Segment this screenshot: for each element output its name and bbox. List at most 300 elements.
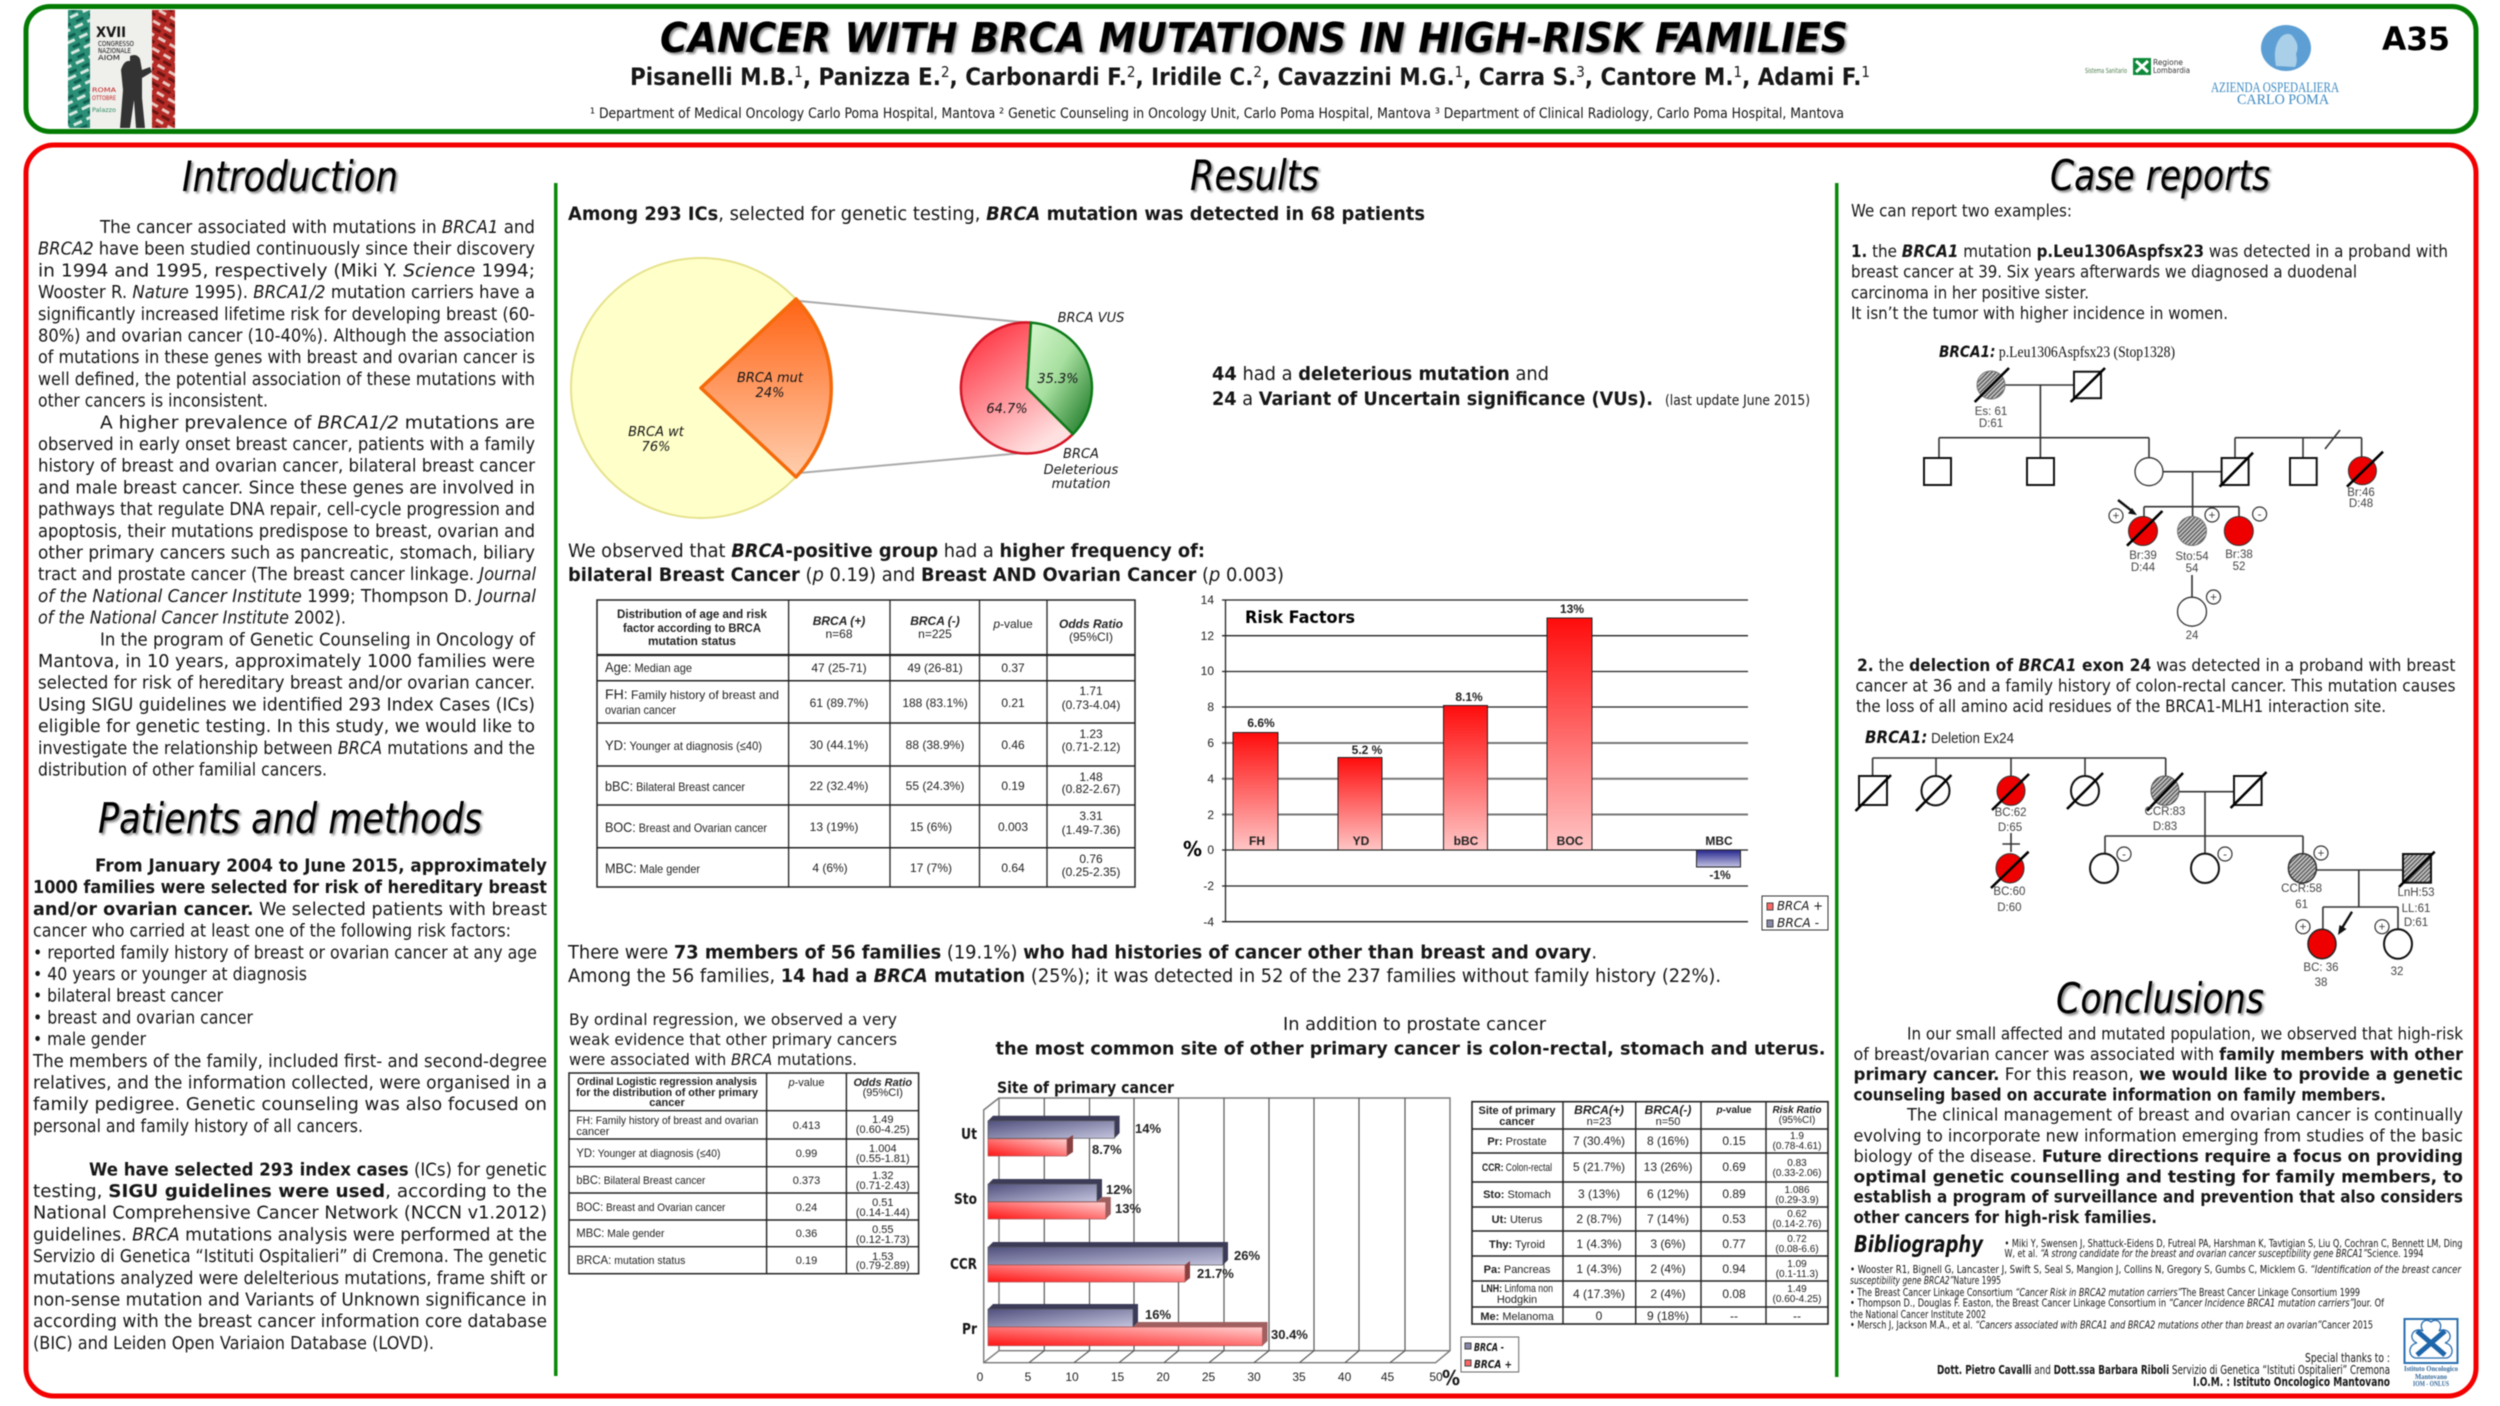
table: ordinal logistic regression: BOC: Breast and Ovarian cancer (576, 1200, 726, 1214)
chart: risk factors bar chart: 10 (1201, 664, 1214, 678)
text block: bibliography: susceptibility gene BRCA2”Nature 1995 (1850, 1275, 2001, 1287)
chart: risk factors bar chart: -1% (1709, 868, 1731, 882)
affiliations: ¹ Department of Medical Oncology Carlo Poma Hospital, Mantova ² Genetic Counseling in Oncology Unit, Carlo Poma Hospital, Mantova ³ Department of Clinical Radiology, Carlo Poma Hospital, Mantova (590, 106, 1844, 122)
text block: bibliography: • Wooster R1, Bignell G, Lancaster J, Swift S, Seal S, Mangion J, Collins N, Gregory S, Gumbs C, Micklem G. “Identification of the breast cancer (1850, 1264, 2462, 1276)
table: distribution of age and risk factor: 0.64 (1001, 861, 1025, 875)
table: site of primary cancer: 1 (4.3%) (1576, 1262, 1622, 1276)
table: distribution of age and risk factor: 1.71 (1079, 684, 1103, 698)
table: ordinal logistic regression: 1.32 (872, 1170, 894, 1182)
table: site of primary cancer: 8 (16%) (1647, 1134, 1689, 1148)
table: site of primary cancer: (0.29-3.9) (1775, 1195, 1819, 1206)
pedigree 1: BRCA1 p.Leu1306Aspfsx23: 24 (2186, 630, 2199, 642)
table: site of primary cancer: 0.89 (1722, 1187, 1746, 1201)
authors: 1 (1734, 63, 1742, 81)
table: site of primary cancer: 4 (17.3%) (1573, 1287, 1625, 1301)
text block: patients and methods: family pedigree. Genetic counseling was also focused on (33, 1095, 547, 1115)
heading: Patients and methods: Patients and methods (98, 794, 482, 843)
chart: site of primary cancer: 5 (1025, 1370, 1032, 1384)
table: distribution of age and risk factor: 15 (6%) (910, 820, 952, 834)
pedigree 1: BRCA1 p.Leu1306Aspfsx23: 52 (2233, 561, 2245, 573)
table: ordinal logistic regression: cancer (649, 1097, 685, 1109)
text block: special thanks: Dott. Pietro Cavalli and Dott.ssa Barbara Riboli Servizio di Genetica “Istituti Ospitalieri” Cremona (1937, 1362, 2390, 1377)
heading: Conclusions: Conclusions (2056, 974, 2264, 1023)
callout: 44 deleterious, 24 VUS (1212, 363, 1810, 410)
chart: site of primary cancer: 45 (1381, 1370, 1394, 1384)
text block: introduction: other primary cancers such as pancreatic, stomach, biliary (38, 544, 535, 564)
text block: conclusions: biology of the disease. Future directions require a focus on providing (1854, 1147, 2463, 1167)
table: site of primary cancer: 6 (12%) (1647, 1187, 1689, 1201)
table: distribution of age and risk factor: 61 (89.7%) (810, 696, 868, 710)
text block: conclusions: of breast/ovarian cancer was associated with family members with other (1854, 1045, 2464, 1065)
poster code A35: A35 (2382, 20, 2450, 58)
text: most common site: In addition to prostate cancer (1283, 1014, 1547, 1035)
logo: Azienda Ospedaliera Carlo Poma: CARLO POMA (2237, 92, 2329, 108)
pedigree 1: BRCA1 p.Leu1306Aspfsx23: Sto:54 (2175, 551, 2209, 563)
table: ordinal logistic regression: 0.24 (796, 1202, 817, 1214)
text block: case report 2: 2. the delection of BRCA1 exon 24 was detected in a proband with breast (1857, 656, 2456, 676)
table: site of primary cancer: (0.14-2.76) (1773, 1219, 1821, 1230)
authors: , Iridile C. (1135, 63, 1253, 91)
table: distribution of age and risk factor: 47 (25-71) (811, 661, 867, 675)
table: distribution of age and risk factor: factor according to BRCA (623, 621, 761, 635)
pedigree 2: BRCA1 deletion Ex24: BC:60 (1993, 886, 2025, 898)
pedigree 2: BRCA1 deletion Ex24 (1856, 728, 2435, 989)
text block: bibliography: W, et al. “A strong candidate for the breast and ovarian cancer susceptibility gene BRCA1”Science. 1994 (2004, 1248, 2424, 1260)
table: site of primary cancer: Site of primary (1478, 1105, 1556, 1117)
logo: Regione Lombardia: Sistema Sanitario (2085, 67, 2127, 75)
table: site of primary cancer: 0.15 (1722, 1134, 1746, 1148)
text block: case report 1 (1851, 202, 2448, 324)
chart: site of primary cancer: 50 (1429, 1370, 1443, 1384)
table: ordinal logistic regression: 0.373 (793, 1175, 820, 1187)
table: distribution of age and risk factor: 13 (19%) (810, 820, 858, 834)
text block: case report 2: cancer at 36 and a family history of colon-rectal cancer. This mutation causes (1856, 677, 2456, 697)
text block: patients and methods: mutations analyzed were delelterious mutations, frame shift or (33, 1269, 548, 1289)
text block: case report 1: 1. the BRCA1 mutation p.Leu1306Aspfsx23 was detected in a proband with (1851, 242, 2448, 262)
chart: risk factors bar chart: 5.2 % (1352, 743, 1383, 757)
text block: conclusions (1854, 1024, 2464, 1228)
table: ordinal logistic regression: 0.413 (793, 1120, 820, 1132)
text: other cancers in families: There were 73 members of 56 families (19.1%) who had histories of cancer other than breast and ovary. (567, 942, 1597, 964)
table: distribution of age and risk factor: Odds Ratio (1059, 617, 1123, 631)
table: ordinal logistic regression: (0.55-1.81) (856, 1153, 910, 1165)
table: ordinal logistic regression (569, 1073, 919, 1274)
text block: conclusions: The clinical management of breast and ovarian cancer is continually (1906, 1106, 2463, 1126)
chart: site of primary cancer: 20 (1156, 1370, 1170, 1384)
table: site of primary cancer: 2 (8.7%) (1576, 1212, 1622, 1226)
table: ordinal logistic regression: Odds Ratio (853, 1077, 912, 1089)
pedigree 1: BRCA1 p.Leu1306Aspfsx23: + (2113, 510, 2120, 522)
text: most common site: the most common site of other primary cancer is colon-rectal, stomach and uterus. (996, 1038, 1826, 1060)
text block: case report 1: breast cancer at 39. Six years afterwards we diagnosed a duodenal (1851, 262, 2357, 282)
text: ordinal regression: were associated with BRCA mutations. (569, 1050, 857, 1069)
table: distribution of age and risk factor: 3.31 (1079, 809, 1103, 823)
text block: patients and methods: Servizio di Genetica “Istituti Ospitalieri” di Cremona. The genetic (33, 1247, 547, 1267)
chart: site of primary cancer: 40 (1338, 1370, 1352, 1384)
table: ordinal logistic regression: (95%CI) (863, 1087, 903, 1099)
table: ordinal logistic regression: for the distribution of other primary (576, 1087, 759, 1099)
chart: site of primary cancer (950, 1078, 1460, 1390)
chart: risk factors bar chart: Risk Factors (1245, 608, 1355, 628)
text block: conclusions: optimal genetic counselling and testing for family members, to (1854, 1168, 2463, 1188)
text block: case report 1: We can report two examples: (1851, 202, 2072, 222)
text block: introduction: 80%) and ovarian cancer (10-40%). Although the association (38, 326, 535, 346)
table: site of primary cancer: 9 (18%) (1647, 1309, 1689, 1323)
table: distribution of age and risk factor: p-value (992, 617, 1033, 631)
text block: patients and methods: The members of the family, included first- and second-degree (32, 1052, 547, 1072)
callout: 44 deleterious, 24 VUS: 44 had a deleterious mutation and (1212, 363, 1549, 385)
table: distribution of age and risk factor: 4 (6%) (812, 861, 848, 875)
table: distribution of age and risk factor: BOC: Breast and Ovarian cancer (605, 819, 767, 835)
chart: BRCA pie of pie: BRCA mut (737, 371, 804, 386)
chart: BRCA pie of pie: BRCA (1063, 447, 1099, 462)
table: site of primary cancer: BRCA(+) (1574, 1103, 1624, 1117)
chart: site of primary cancer: Site of primary cancer (997, 1078, 1174, 1097)
pedigree 1: BRCA1 p.Leu1306Aspfsx23: D:61 (1979, 418, 2003, 430)
authors: , Cavazzini M.G. (1262, 63, 1455, 91)
table: ordinal logistic regression: p-value (787, 1077, 825, 1089)
table: distribution of age and risk factor: (0.82-2.67) (1062, 782, 1120, 796)
heading: Case reports: Case reports (2050, 151, 2270, 200)
table: site of primary cancer: 0.83 (1787, 1158, 1807, 1169)
text block: conclusions: primary cancer. For this reason, we would like to provide a genetic (1854, 1065, 2463, 1085)
table: site of primary cancer: 0.62 (1787, 1209, 1807, 1220)
legend: site chart (1461, 1337, 1519, 1372)
table: site of primary cancer: 0.69 (1722, 1160, 1746, 1174)
chart: BRCA pie of pie: mutation (1052, 477, 1110, 492)
text block: introduction: In the program of Genetic Counseling in Oncology of (100, 630, 536, 650)
authors: , Cantore M. (1585, 63, 1734, 91)
column dividers (554, 183, 1838, 1377)
callout: 44 deleterious, 24 VUS: (last update June 2015) (1665, 393, 1810, 409)
chart: risk factors bar chart: 0 (1207, 843, 1214, 857)
text block: patients and methods: • breast and ovarian cancer (33, 1008, 254, 1028)
text block: special thanks: Special thanks to : (2305, 1350, 2390, 1365)
table: ordinal logistic regression: (0.79-2.89) (856, 1260, 910, 1272)
table: distribution of age and risk factor (597, 600, 1135, 887)
text: higher frequency: bilateral Breast Cancer (p 0.19) and Breast AND Ovarian Cancer (p 0.003) (568, 564, 1284, 586)
table: site of primary cancer: Ut: Uterus (1492, 1214, 1543, 1226)
text block: bibliography: • Mersch J, Jackson M.A., et al. “Cancers associated with BRCA1 and BRCA2 mutations other than breast an ovarian”Cancer 2015 (1850, 1320, 2373, 1332)
table: site of primary cancer: -- (1793, 1309, 1801, 1323)
table: site of primary cancer: 0.08 (1722, 1287, 1746, 1301)
table: site of primary cancer: 2 (4%) (1650, 1262, 1686, 1276)
pedigree 1: BRCA1 p.Leu1306Aspfsx23 (1924, 342, 2383, 642)
pedigree 2: BRCA1 deletion Ex24: BC:62 (1995, 807, 2027, 819)
table: site of primary cancer: p-value (1715, 1105, 1752, 1116)
chart: site of primary cancer: CCR (950, 1255, 977, 1273)
table: distribution of age and risk factor: Age: Median age (605, 659, 692, 675)
text block: case report 2: the loss of all amino acid residues of the BRCA1-MLH1 interaction site. (1856, 697, 2386, 717)
poster thumbnail: XVII Congresso Nazionale AIOM (68, 10, 175, 128)
poster thumbnail: XVII Congresso Nazionale AIOM: NAZIONALE (98, 47, 131, 55)
table: distribution of age and risk factor: 0.37 (1001, 661, 1025, 675)
text block: case report 1: carcinoma in her positive sister. (1851, 284, 2089, 304)
text: most common site (996, 1014, 1826, 1060)
text block: patients and methods (32, 856, 548, 1354)
chart: risk factors bar chart: 6 (1207, 736, 1214, 750)
text block: introduction: and male breast cancer. Since these genes are involved in (38, 478, 535, 498)
legend: site chart: BRCA + (1474, 1358, 1512, 1371)
table: distribution of age and risk factor: 22 (32.4%) (810, 779, 868, 793)
chart: risk factors bar chart: 8.1% (1455, 690, 1483, 704)
table: site of primary cancer: (0.08-6.6) (1775, 1244, 1819, 1255)
text block: patients and methods: (BIC) and Leiden Open Variaion Database (LOVD). (33, 1334, 434, 1354)
chart: risk factors bar chart: BOC (1557, 834, 1584, 848)
logo: Azienda Ospedaliera Carlo Poma (2211, 25, 2339, 108)
chart: risk factors bar chart: 4 (1207, 772, 1214, 786)
pedigree 2: BRCA1 deletion Ex24: + (2300, 922, 2307, 934)
logo: Istituto Oncologico Mantovano: Mantovano (2415, 1373, 2447, 1381)
text block: bibliography: the National Cancer Institute 2002 (1850, 1309, 1986, 1321)
table: site of primary cancer: Pr: Prostate (1487, 1136, 1547, 1148)
authors: 3 (1576, 63, 1585, 81)
chart: site of primary cancer: 30.4% (1271, 1327, 1308, 1342)
pedigree 1: BRCA1 p.Leu1306Aspfsx23: Br:39 (2129, 550, 2157, 562)
chart: BRCA pie of pie: BRCA wt (628, 425, 685, 440)
pedigree 2: BRCA1 deletion Ex24: BC: 36 (2303, 962, 2339, 974)
text: ordinal regression (569, 1010, 897, 1069)
text block: introduction: selected for risk of hereditary breast and/or ovarian cancer. (38, 674, 535, 694)
table: site of primary cancer: 0.77 (1722, 1237, 1746, 1251)
table: site of primary cancer: 0.53 (1722, 1212, 1746, 1226)
table: distribution of age and risk factor: 49 (26-81) (907, 661, 963, 675)
table: distribution of age and risk factor: 30 (44.1%) (810, 738, 868, 752)
pedigree 1: BRCA1 p.Leu1306Aspfsx23: Br:38 (2225, 549, 2253, 561)
text block: special thanks (1937, 1350, 2390, 1389)
pedigree 1: BRCA1 p.Leu1306Aspfsx23: D:44 (2131, 562, 2156, 574)
pedigree 2: BRCA1 deletion Ex24: 61 (2295, 899, 2308, 911)
table: site of primary cancer: 0.72 (1787, 1234, 1807, 1245)
chart: risk factors bar chart: -2 (1203, 879, 1214, 893)
chart: site of primary cancer: 30 (1247, 1370, 1261, 1384)
text block: introduction: other cancers is inconsistent. (38, 392, 268, 412)
table: site of primary cancer: 3 (6%) (1650, 1237, 1686, 1251)
table: ordinal logistic regression: Ordinal Logistic regression analysis (577, 1076, 757, 1088)
text block: bibliography: • The Breast Cancer Linkage Consortium “Cancer Risk in BRCA2 mutation carriers”The Breast Cancer Linkage Consortium 1999 (1850, 1287, 2360, 1299)
text block: patients and methods: according with the breast cancer information core database (33, 1312, 547, 1332)
table: ordinal logistic regression: MBC: Male gender (576, 1226, 665, 1240)
table: site of primary cancer: Sto: Stomach (1483, 1189, 1551, 1201)
text block: case report 1: It isn’t the tumor with higher incidence in women. (1851, 304, 2228, 324)
text block: patients and methods: and/or ovarian cancer. We selected patients with breast (33, 900, 547, 920)
poster thumbnail: XVII Congresso Nazionale AIOM: OTTOBRE (92, 95, 116, 102)
table: site of primary cancer: n=50 (1656, 1116, 1680, 1128)
text: higher frequency: We observed that BRCA-positive group had a higher frequency of: (568, 540, 1205, 562)
text block: conclusions: other cancers for high-risk families. (1854, 1208, 2157, 1228)
table: distribution of age and risk factor: 0.76 (1079, 852, 1103, 866)
chart: site of primary cancer: 8.7% (1092, 1142, 1122, 1157)
table: site of primary cancer: Risk Ratio (1773, 1105, 1821, 1116)
pedigree 2: BRCA1 deletion Ex24: D:65 (1998, 822, 2022, 834)
text block: patients and methods: We have selected 293 index cases (ICs) for genetic (89, 1160, 547, 1180)
chart: risk factors bar chart: BRCA - (1777, 916, 1819, 930)
table: ordinal logistic regression: 1.49 (872, 1114, 894, 1126)
table: distribution of age and risk factor: YD: Younger at diagnosis (≤40) (605, 737, 762, 753)
text block: conclusions: counseling based on accurate information on family members. (1854, 1086, 2386, 1106)
pedigree 2: BRCA1 deletion Ex24: - (2122, 849, 2126, 861)
table: distribution of age and risk factor: 188 (83.1%) (902, 696, 968, 710)
text block: introduction: of the National Cancer Institute 1999; Thompson D. Journal (38, 587, 536, 607)
pedigree 2: BRCA1 deletion Ex24: LL:61 (2402, 903, 2430, 915)
text block: introduction: eligible for genetic testing. In this study, we would like to (38, 717, 535, 737)
text block: bibliography (1850, 1238, 2462, 1332)
table: site of primary cancer: CCR: Colon-rectal (1482, 1162, 1552, 1174)
table: ordinal logistic regression: 0.51 (872, 1197, 894, 1209)
chart: risk factors bar chart: 8 (1207, 700, 1214, 714)
authors: 1 (1861, 63, 1870, 81)
heading: Introduction: Introduction (182, 152, 398, 201)
pedigree 2: BRCA1 deletion Ex24: - (2223, 849, 2227, 861)
text block: patients and methods: • male gender (33, 1030, 147, 1050)
table: site of primary cancer: 1.086 (1784, 1185, 1810, 1196)
table: site of primary cancer: 0.94 (1722, 1262, 1746, 1276)
chart: risk factors bar chart: FH (1249, 834, 1265, 848)
table: site of primary cancer: 3 (13%) (1578, 1187, 1620, 1201)
table: ordinal logistic regression: FH: Family history of breast and ovarian (576, 1115, 758, 1127)
chart: risk factors bar chart: 6.6% (1247, 716, 1275, 730)
chart: BRCA pie of pie: 64.7% (986, 402, 1028, 417)
pedigree 2: BRCA1 deletion Ex24: 32 (2391, 966, 2403, 978)
table: ordinal logistic regression: 1.53 (872, 1251, 894, 1263)
text block: patients and methods: • 40 years or younger at diagnosis (33, 965, 307, 985)
authors: , Carra S. (1463, 63, 1576, 91)
table: distribution of age and risk factor: 17 (7%) (910, 861, 952, 875)
table: distribution of age and risk factor: 55 (24.3%) (906, 779, 964, 793)
authors: 1 (1455, 63, 1463, 81)
poster thumbnail: XVII Congresso Nazionale AIOM: AIOM (98, 54, 120, 62)
text block: introduction: in 1994 and 1995, respectively (Miki Y. Science 1994; (38, 261, 535, 281)
chart: site of primary cancer: % (1442, 1366, 1460, 1390)
table: site of primary cancer: (0.33-2.06) (1773, 1168, 1821, 1179)
table: site of primary cancer: cancer (1499, 1116, 1535, 1128)
chart: BRCA pie of pie: BRCA VUS (1058, 311, 1124, 326)
chart: site of primary cancer: 12% (1106, 1182, 1132, 1197)
text block: introduction: apoptosis, their mutations predispose to breast, ovarian and (38, 522, 535, 542)
table: distribution of age and risk factor: bBC: Bilateral Breast cancer (605, 778, 745, 794)
chart: BRCA pie of pie (571, 258, 1124, 518)
text block: patients and methods: cancer who carried at least one of the following risk factors: (33, 922, 511, 942)
text block: introduction: significantly increased lifetime risk for developing breast (60- (38, 305, 535, 325)
chart: risk factors bar chart: bBC (1454, 834, 1479, 848)
chart: BRCA pie of pie: 24% (756, 386, 784, 401)
table: site of primary cancer: (95%CI) (1779, 1115, 1815, 1126)
chart: risk factors bar chart: -4 (1203, 915, 1214, 929)
pedigree 2: BRCA1 deletion Ex24: D:83 (2153, 821, 2177, 833)
table: distribution of age and risk factor: 0.003 (998, 820, 1028, 834)
pedigree 1: BRCA1 p.Leu1306Aspfsx23: + (2209, 510, 2216, 522)
heading: Bibliography: Bibliography (1854, 1232, 1984, 1258)
text block: patients and methods: personal and family history of all cancers. (33, 1117, 363, 1137)
chart: BRCA pie of pie: Deleterious (1044, 463, 1119, 478)
chart: site of primary cancer: 26% (1234, 1248, 1260, 1263)
table: distribution of age and risk factor: ovarian cancer (605, 703, 676, 717)
table: site of primary cancer: BRCA(-) (1645, 1103, 1691, 1117)
text block: patients and methods: • reported family history of breast or ovarian cancer at any age (33, 943, 537, 963)
table: site of primary cancer: Pa: Pancreas (1484, 1264, 1551, 1276)
table: distribution of age and risk factor: FH: Family history of breast and (605, 686, 779, 702)
poster thumbnail: XVII Congresso Nazionale AIOM: XVII (96, 25, 126, 41)
table: distribution of age and risk factor: 0.19 (1001, 779, 1025, 793)
chart: risk factors bar chart: 2 (1207, 808, 1214, 822)
table: site of primary cancer: 13 (26%) (1644, 1160, 1692, 1174)
authors: , Adami F. (1742, 63, 1861, 91)
poster thumbnail: XVII Congresso Nazionale AIOM: CONGRESSO (98, 40, 134, 48)
table: site of primary cancer: -- (1730, 1309, 1738, 1323)
text block: patients and methods: 1000 families were selected for risk of hereditary breast (33, 878, 547, 898)
heading: Results: Results (1190, 151, 1319, 200)
authors: , Panizza E. (803, 63, 941, 91)
chart: risk factors bar chart: MBC (1705, 834, 1733, 848)
table: ordinal logistic regression: BRCA: mutation status (576, 1253, 686, 1267)
table: distribution of age and risk factor: BRCA (+) (813, 614, 865, 628)
text block: introduction: BRCA2 have been studied continuously since their discovery (38, 240, 535, 260)
pedigree 1: BRCA1 p.Leu1306Aspfsx23: - (2258, 509, 2262, 521)
chart: risk factors bar chart: 12 (1201, 629, 1214, 643)
chart: BRCA pie of pie: 76% (642, 440, 670, 455)
table: site of primary cancer: (0.78-4.61) (1773, 1141, 1821, 1152)
text block: introduction: Using SIGU guidelines we identified 293 Index Cases (ICs) (38, 695, 535, 715)
table: distribution of age and risk factor: 1.23 (1079, 727, 1103, 741)
text: other cancers in families: Among the 56 families, 14 had a BRCA mutation (25%); it was detected in 52 of the 237 families without family history (22%). (568, 965, 1721, 987)
text block: patients and methods: relatives, and the information collected, were organised in a (33, 1074, 547, 1094)
table: distribution of age and risk factor: 1.48 (1079, 770, 1103, 784)
logo: Azienda Ospedaliera Carlo Poma: AZIENDA OSPEDALIERA (2211, 80, 2339, 96)
authors: 2 (1127, 63, 1135, 81)
table: ordinal logistic regression: cancer (576, 1126, 610, 1138)
table: site of primary cancer: 1.9 (1790, 1131, 1804, 1142)
poster thumbnail: XVII Congresso Nazionale AIOM: Palazzo (92, 107, 116, 114)
table: distribution of age and risk factor: 0.21 (1001, 696, 1025, 710)
pedigree 2: BRCA1 deletion Ex24: BRCA1: Deletion Ex24 (1865, 728, 2014, 748)
table: site of primary cancer: LNH: Linfoma non (1481, 1283, 1553, 1295)
table: ordinal logistic regression: 0.55 (872, 1224, 894, 1236)
pedigree 1: BRCA1 p.Leu1306Aspfsx23: + (2210, 592, 2217, 604)
pedigree 2: BRCA1 deletion Ex24: LnH:53 (2397, 887, 2435, 899)
callout: 44 deleterious, 24 VUS: 24 a Variant of Uncertain significance (VUs). (1212, 388, 1653, 410)
logo: Regione Lombardia: Lombardia (2153, 66, 2190, 75)
pedigree 2: BRCA1 deletion Ex24: D:61 (2404, 917, 2428, 929)
table: site of primary cancer: 7 (14%) (1647, 1212, 1689, 1226)
table: ordinal logistic regression: 0.36 (796, 1228, 817, 1240)
table: distribution of age and risk factor: (0.73-4.04) (1062, 698, 1120, 712)
table: ordinal logistic regression: 0.99 (796, 1148, 817, 1160)
logo: Regione Lombardia (2085, 58, 2190, 75)
table: site of primary cancer: Hodgkin (1497, 1294, 1537, 1306)
table: ordinal logistic regression: (0.12-1.73) (856, 1234, 910, 1246)
legend: site chart: BRCA - (1474, 1341, 1504, 1354)
table: distribution of age and risk factor: 88 (38.9%) (906, 738, 964, 752)
text block: introduction: history of breast and ovarian cancer, bilateral breast cancer (38, 457, 536, 477)
pedigree 2: BRCA1 deletion Ex24: + (2379, 922, 2386, 934)
authors: 2 (1253, 63, 1262, 81)
authors: 2 (941, 63, 950, 81)
table: site of primary cancer: 7 (30.4%) (1573, 1134, 1625, 1148)
chart: risk factors bar chart: % (1183, 837, 1202, 861)
text block: introduction: of mutations in these genes with breast and ovarian cancer is (38, 348, 535, 368)
text block: introduction: tract and prostate cancer (The breast cancer linkage. Journal (38, 565, 536, 585)
table: site of primary cancer: n=23 (1587, 1116, 1611, 1128)
text: ordinal regression: By ordinal regression, we observed a very (569, 1010, 897, 1029)
text block: introduction: of the National Cancer Institute 2002). (38, 609, 346, 629)
pedigree 2: BRCA1 deletion Ex24: + (2318, 848, 2325, 860)
text block: introduction: observed in early onset breast cancer, patients with a family (38, 435, 535, 455)
table: distribution of age and risk factor: n=68 (825, 627, 853, 641)
table: site of primary cancer: 0 (1596, 1309, 1603, 1323)
pedigree 2: BRCA1 deletion Ex24: CCR:83 (2145, 806, 2185, 818)
text block: introduction (38, 218, 536, 780)
chart: site of primary cancer: Pr (962, 1320, 977, 1338)
